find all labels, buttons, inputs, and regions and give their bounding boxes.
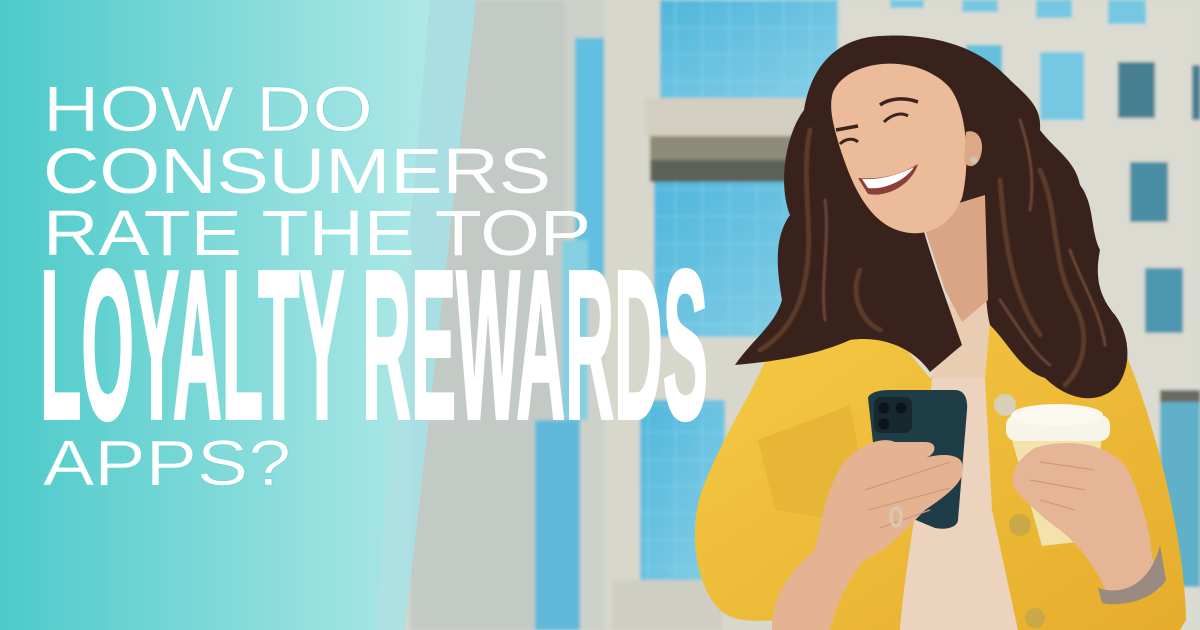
face [831, 64, 966, 233]
ear and earring [964, 131, 982, 166]
phone camera [874, 397, 912, 433]
eyes and brows [836, 99, 918, 144]
jacket [695, 288, 1186, 630]
title line: consumers: CONSUMERS [43, 135, 551, 207]
jacket buttons [994, 394, 1045, 628]
neck [920, 195, 988, 322]
watch [1098, 545, 1166, 604]
cup [1006, 404, 1110, 546]
phone [868, 390, 967, 529]
shirt [900, 378, 1018, 630]
title line: how do: HOW DO [43, 73, 373, 145]
smile [858, 164, 918, 195]
jacket pocket [758, 405, 862, 520]
title line: apps: APPS? [43, 427, 291, 499]
title [40, 73, 708, 499]
teal panel [0, 0, 430, 630]
woman [695, 36, 1186, 630]
hand and arm holding phone [772, 440, 963, 630]
translucent band [375, 0, 476, 630]
hair [735, 36, 1127, 398]
title line: rate the top: RATE THE TOP [43, 197, 591, 269]
ring [891, 508, 901, 526]
hand and arm holding cup [1013, 443, 1160, 600]
